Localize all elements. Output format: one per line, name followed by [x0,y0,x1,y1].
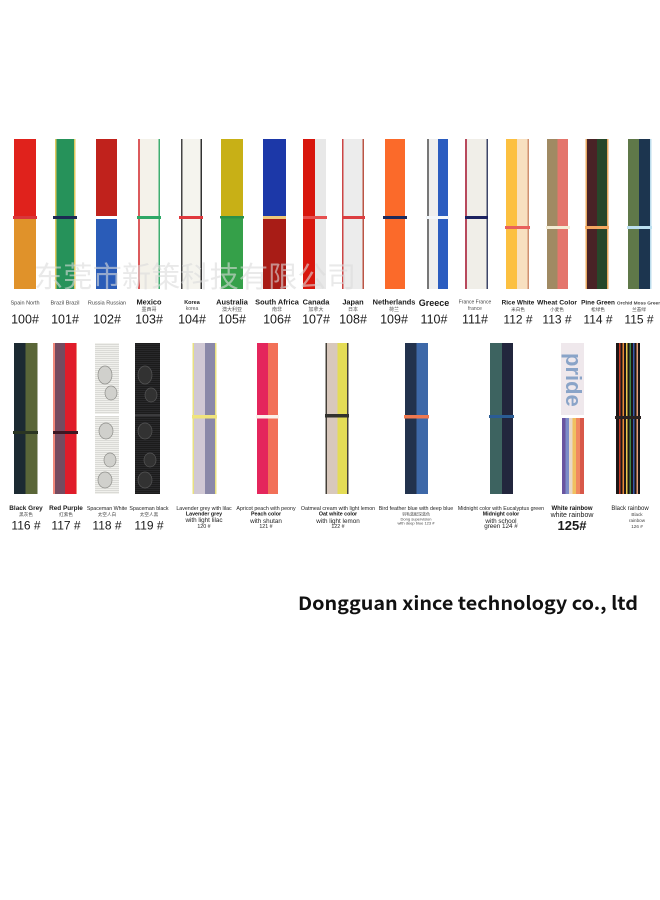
label 126 [611,506,649,529]
strap 117 [53,343,78,494]
label 120: with light lilac [184,517,223,524]
strap 102 [95,139,118,289]
label 118: 太空人白 [98,511,116,518]
label 123: with deep blue 123 # [398,520,435,526]
label 117: 117 # [51,518,81,532]
label 102: Russia Russian [88,300,126,306]
label 121: with shutan [249,518,282,525]
label 126: Black [631,512,643,517]
strap 101 [53,139,77,289]
label 117: Red Purple [49,505,83,512]
strap 104 [179,139,203,289]
label 124: Midnight color with Eucalyptus green [458,506,544,512]
label 122: with light lemon [315,518,360,525]
label 125: White rainbow [552,506,593,512]
label 103: Mexico [136,298,162,306]
label 111: France France [459,300,491,306]
label 106: 106# [263,312,291,326]
label 111: france [468,306,482,312]
label 113: 113 # [542,312,572,326]
label 121: 121 # [259,524,273,530]
label 101: Brazil Brazil [50,300,80,306]
label 114: Pine Green [581,300,615,306]
label 113 [537,300,577,326]
label 117 [49,505,83,532]
label 125: white rainbow [550,512,594,519]
label 107 [302,298,330,326]
label 108 [339,298,367,326]
label 120: Lavender grey with lilac [176,506,232,512]
label 115: Orchid Moss Green [617,300,660,306]
strap 121 [256,343,279,494]
label 122: Oatmeal cream with light lemon [301,506,375,512]
strap 123 [404,343,429,494]
label 115: 115 # [624,312,654,326]
label 114 [581,300,615,326]
label 121 [236,506,296,530]
label 125 [550,506,594,533]
label 116: 116 # [11,518,41,532]
label 111 [459,300,491,326]
label 103 [135,298,163,326]
label 110: Greece [419,298,449,308]
label 119 [129,506,169,532]
label 105: Australia [216,298,249,306]
strap 100 [13,139,37,289]
label 119: 119 # [134,518,164,532]
label 108: 108# [339,312,367,326]
label 109: 109# [380,312,408,326]
label 122: Oat white color [319,512,357,518]
label 113: 小麦色 [550,306,564,313]
label 100 [10,300,40,326]
label 120: Lavender grey [186,512,222,518]
label 106 [255,298,300,326]
label 107: Canada [303,298,330,306]
strap 109 [383,139,407,289]
label 102 [88,300,126,326]
strap 116 [13,343,38,494]
label 123: 羽毛蓝配深蓝色 [402,510,430,516]
strap 124 [489,343,514,494]
label 124: green 124 # [484,523,518,530]
label 112: 112 # [503,312,533,326]
label 112 [502,300,535,326]
watermark: 东莞市新策科技有限公司 [34,261,356,294]
label 109: Netherlands [373,298,415,306]
label 104: korea [186,306,198,312]
label 126: rainbow [629,518,646,523]
label 118: Spaceman White [87,506,127,512]
label 105 [216,298,249,326]
strap 106 [263,139,286,289]
label 106: South Africa [255,298,300,306]
label 123: Dong supervision [401,516,431,522]
strap 103 [137,139,161,289]
label 123: Bird feather blue with deep blue [379,506,453,512]
label 119: Spaceman black [129,506,169,512]
label 113: Wheat Color [537,300,577,306]
company name: Dongguan xince technology co., ltd [298,590,638,616]
label 106: 南非 [272,306,282,313]
label 108: Japan [342,298,364,306]
strap 110 [426,139,449,289]
row 1 labels [10,298,660,326]
label 120 [176,506,232,530]
label 109 [373,298,415,326]
label 116: Black Grey [9,505,43,512]
label 100: Spain North [10,300,40,306]
row 2 straps [13,343,641,494]
label 111: 111# [462,312,488,326]
strap 113 [546,139,570,289]
label 104 [178,300,206,326]
label 102: 102# [93,312,121,326]
strap 119: spaceman black [135,343,160,494]
label 110: 110# [421,312,447,326]
label 126: Black rainbow [611,506,649,512]
label 125: 125# [558,518,587,533]
label 117: 红紫色 [59,511,73,517]
label 101 [50,300,80,326]
label 105: 105# [218,312,246,326]
label 119: 太空人黑 [140,511,159,518]
label 122: 122 # [331,524,345,530]
strap 120 [192,343,217,494]
strap 108 [342,139,365,289]
label 118: 118 # [92,518,122,532]
strap 126: black rainbow [615,343,641,494]
label 121: Apricot peach with peony [236,506,296,512]
label 115 [617,300,660,326]
label 126: 126 # [631,524,643,529]
strap 112 [505,139,530,289]
label 104: 104# [178,312,206,326]
label 123 [379,506,453,526]
strap 114 [585,139,609,289]
label 110 [419,298,449,326]
label 101: 101# [51,312,79,326]
label 105: 澳大利亚 [222,306,242,313]
strap 111 [465,139,488,289]
label 103: 103# [135,312,163,326]
label 100: 100# [11,312,39,326]
label 124: with school [484,518,517,525]
label 104: Korea [184,300,201,306]
label 114: 松绿色 [591,306,605,313]
row 2 labels [9,505,649,533]
pride lettering: pride [561,353,586,407]
strap 122 [325,343,349,494]
label 121: Peach color [251,512,281,518]
strap 107 [303,139,327,289]
label 115: 兰苔绿 [632,306,646,313]
label 107: 加拿大 [308,306,324,313]
row 1 straps [13,139,652,289]
label 112: Rice White [502,300,535,306]
label 112: 米白色 [511,306,525,313]
strap 125: pride rainbow [560,343,586,494]
label 122 [301,506,375,530]
label 124 [458,506,544,530]
label 124: Midnight color [483,512,519,518]
label 116: 黑灰色 [19,511,33,518]
label 114: 114 # [583,312,613,326]
label 116 [9,505,43,532]
label 103: 墨西哥 [141,307,157,313]
label 107: 107# [302,312,330,326]
label 108: 日本 [348,306,358,313]
label 120: 120 # [197,524,211,530]
strap 115 [627,139,652,289]
label 109: 荷兰 [389,306,399,313]
strap 105 [220,139,244,289]
label 118 [87,506,127,532]
strap 118: spaceman white [95,343,119,494]
